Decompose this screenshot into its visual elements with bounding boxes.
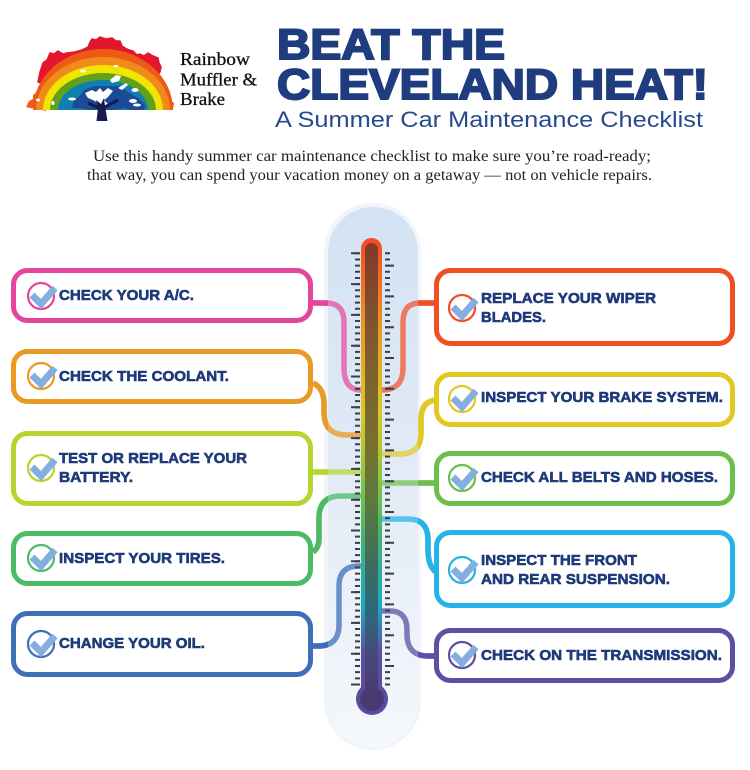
intro text: that way, you can spend your vacation money on a getaway — not on vehicle repairs. xyxy=(87,167,652,184)
item: check the coolant: CHECK THE COOLANT. xyxy=(59,368,229,385)
title: CLEVELAND HEAT! xyxy=(277,61,708,109)
logo text xyxy=(180,49,257,109)
item: inspect your brake system: INSPECT YOUR BRAKE SYSTEM. xyxy=(481,389,723,406)
title xyxy=(277,21,708,109)
thermometer tube xyxy=(356,238,388,715)
item: check the coolant xyxy=(14,352,310,402)
icon: rainbow tree xyxy=(26,36,174,121)
item: check your A/C: CHECK YOUR A/C. xyxy=(59,287,194,304)
logo: Rainbow Muffler & Brake xyxy=(26,36,257,121)
item: inspect your tires: INSPECT YOUR TIRES. xyxy=(59,550,225,567)
item: change your oil xyxy=(14,614,310,674)
connectors xyxy=(311,303,436,656)
thermometer background xyxy=(324,203,421,750)
logo text: Muffler & xyxy=(180,70,257,90)
item: check all belts and hoses: CHECK ALL BELTS AND HOSES. xyxy=(481,469,718,486)
item: replace your wiper blades: REPLACE YOUR WIPER xyxy=(481,290,656,307)
item: inspect the front and rear suspension xyxy=(436,532,732,606)
item: check your A/C xyxy=(14,270,310,320)
thermometer ticks xyxy=(356,252,390,686)
logo text: Brake xyxy=(180,89,225,109)
item: test or replace your battery xyxy=(14,434,310,504)
item: test or replace your battery: TEST OR REPLACE YOUR xyxy=(59,450,247,467)
subtitle: A Summer Car Maintenance Checklist xyxy=(275,107,703,132)
item: inspect the front and rear suspension: AND REAR SUSPENSION. xyxy=(481,571,670,588)
logo text: Rainbow xyxy=(180,49,250,69)
item: inspect your tires xyxy=(14,534,310,584)
item: test or replace your battery: BATTERY. xyxy=(59,469,133,486)
title: BEAT THE xyxy=(277,21,505,69)
item: replace your wiper blades: BLADES. xyxy=(481,309,546,326)
item: check on the transmission xyxy=(436,630,732,680)
item: inspect your brake system xyxy=(436,374,732,424)
intro text xyxy=(87,148,652,184)
item: check on the transmission: CHECK ON THE TRANSMISSION. xyxy=(481,647,722,664)
item: inspect the front and rear suspension: INSPECT THE FRONT xyxy=(481,552,637,569)
item: replace your wiper blades xyxy=(436,270,732,344)
item: check all belts and hoses xyxy=(436,454,732,504)
intro text: Use this handy summer car maintenance checklist to make sure you’re road-ready; xyxy=(93,148,651,165)
item: change your oil: CHANGE YOUR OIL. xyxy=(59,635,205,652)
